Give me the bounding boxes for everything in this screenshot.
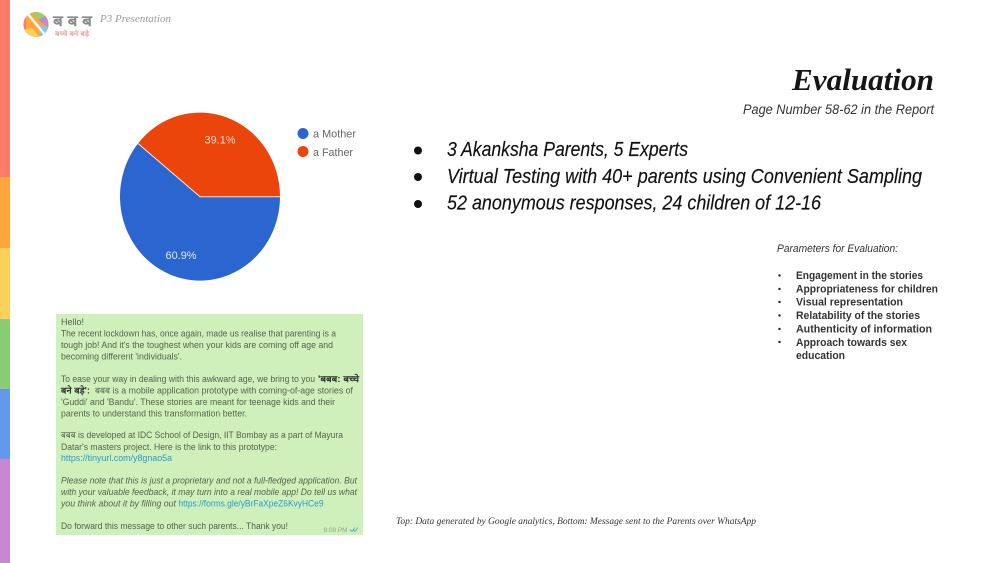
pie chart <box>120 113 280 281</box>
caption: Top: Data generated by Google analytics, Bottom: Message sent to the Parents over WhatsApp <box>396 517 756 527</box>
presentation label: P3 Presentation <box>99 13 171 25</box>
message paragraph 1: becoming different 'individuals'. <box>61 352 182 362</box>
parameters list: Engagement in the stories <box>796 270 923 282</box>
message paragraph 2: 'Guddi' and 'Bandu'. These stories are meant for teenage kids and their <box>61 397 335 407</box>
label: 39.1%: 39.1% <box>204 134 236 146</box>
message paragraph 1: tough job! And it's the toughest when your kids are coming off age and <box>61 340 333 350</box>
message sign-off: Do forward this message to other such parents... Thank you! <box>61 521 288 531</box>
key points list <box>414 139 922 214</box>
message paragraph 4: Please note that this is just a proprietary and not a full-fledged application. But <box>61 476 357 486</box>
message paragraph 4: https://forms.gle/yBrFaXpeZ6KvyHCe9 <box>178 498 324 508</box>
key points list: 3 Akanksha Parents, 5 Experts <box>447 139 688 161</box>
key points list: 52 anonymous responses, 24 children of 12-16 <box>447 192 822 214</box>
parameters for evaluation <box>777 243 938 362</box>
chart legend <box>298 128 356 159</box>
message paragraph 3: बबब is developed at IDC School of Design, IIT Bombay as a part of Mayura <box>61 430 343 440</box>
parameters list: Approach towards sex <box>796 337 908 349</box>
message paragraph 2 <box>60 373 360 418</box>
title: Evaluation <box>791 62 934 97</box>
message paragraph 2: बबब is a mobile application prototype with coming-of-age stories of <box>95 386 353 396</box>
parameters list <box>778 270 938 362</box>
message paragraph 1 <box>61 317 336 362</box>
message paragraph 2: parents to understand this transformation better. <box>61 408 247 418</box>
message paragraph 2: बने बड़े': <box>60 384 90 396</box>
message paragraph 3: https://tinyurl.com/y8gnao5a <box>61 453 172 463</box>
page reference: Page Number 58-62 in the Report <box>743 102 935 117</box>
parameters heading: Parameters for Evaluation: <box>777 243 898 255</box>
slice: a Father 39.1% <box>138 113 280 197</box>
rainbow side strip <box>0 0 10 563</box>
message paragraph 2: 'बबब: बच्चे <box>318 373 360 384</box>
label: 60.9%: 60.9% <box>166 250 197 262</box>
icon: read ticks <box>350 528 358 532</box>
message paragraph 3 <box>61 430 343 463</box>
chart legend: a Mother <box>313 128 356 140</box>
message paragraph 4: with your valuable feedback, it may turn into a real mobile app! Do tell us what <box>61 487 357 497</box>
logo tagline: बच्चे बने बड़े <box>54 29 89 38</box>
message paragraph 3: Datar's masters project. Here is the link to this prototype: <box>61 442 277 452</box>
icon: logo circle <box>23 12 49 38</box>
parameters list: Relatability of the stories <box>796 310 920 322</box>
parameters list: Authenticity of information <box>796 324 932 336</box>
parameters list: Visual representation <box>796 296 903 308</box>
logo wordmark: ब ब ब <box>52 13 94 30</box>
message paragraph 1: Hello! <box>61 317 84 327</box>
message timestamp: 9:08 PM <box>324 527 348 534</box>
message paragraph 4 <box>60 476 357 508</box>
parameters list: education <box>796 350 845 362</box>
message paragraph 4: you think about it by filling out <box>60 498 176 508</box>
WhatsApp message panel <box>56 314 363 535</box>
chart legend: a Father <box>313 147 353 159</box>
message paragraph 1: The recent lockdown has, once again, made us realise that parenting is a <box>61 328 336 338</box>
key points list: Virtual Testing with 40+ parents using Convenient Sampling <box>447 166 922 188</box>
parameters list: Appropriateness for children <box>796 284 938 296</box>
slice: a Mother 60.9% <box>120 144 280 281</box>
logo <box>23 12 94 38</box>
message paragraph 2: To ease your way in dealing with this awkward age, we bring to you <box>61 374 315 384</box>
